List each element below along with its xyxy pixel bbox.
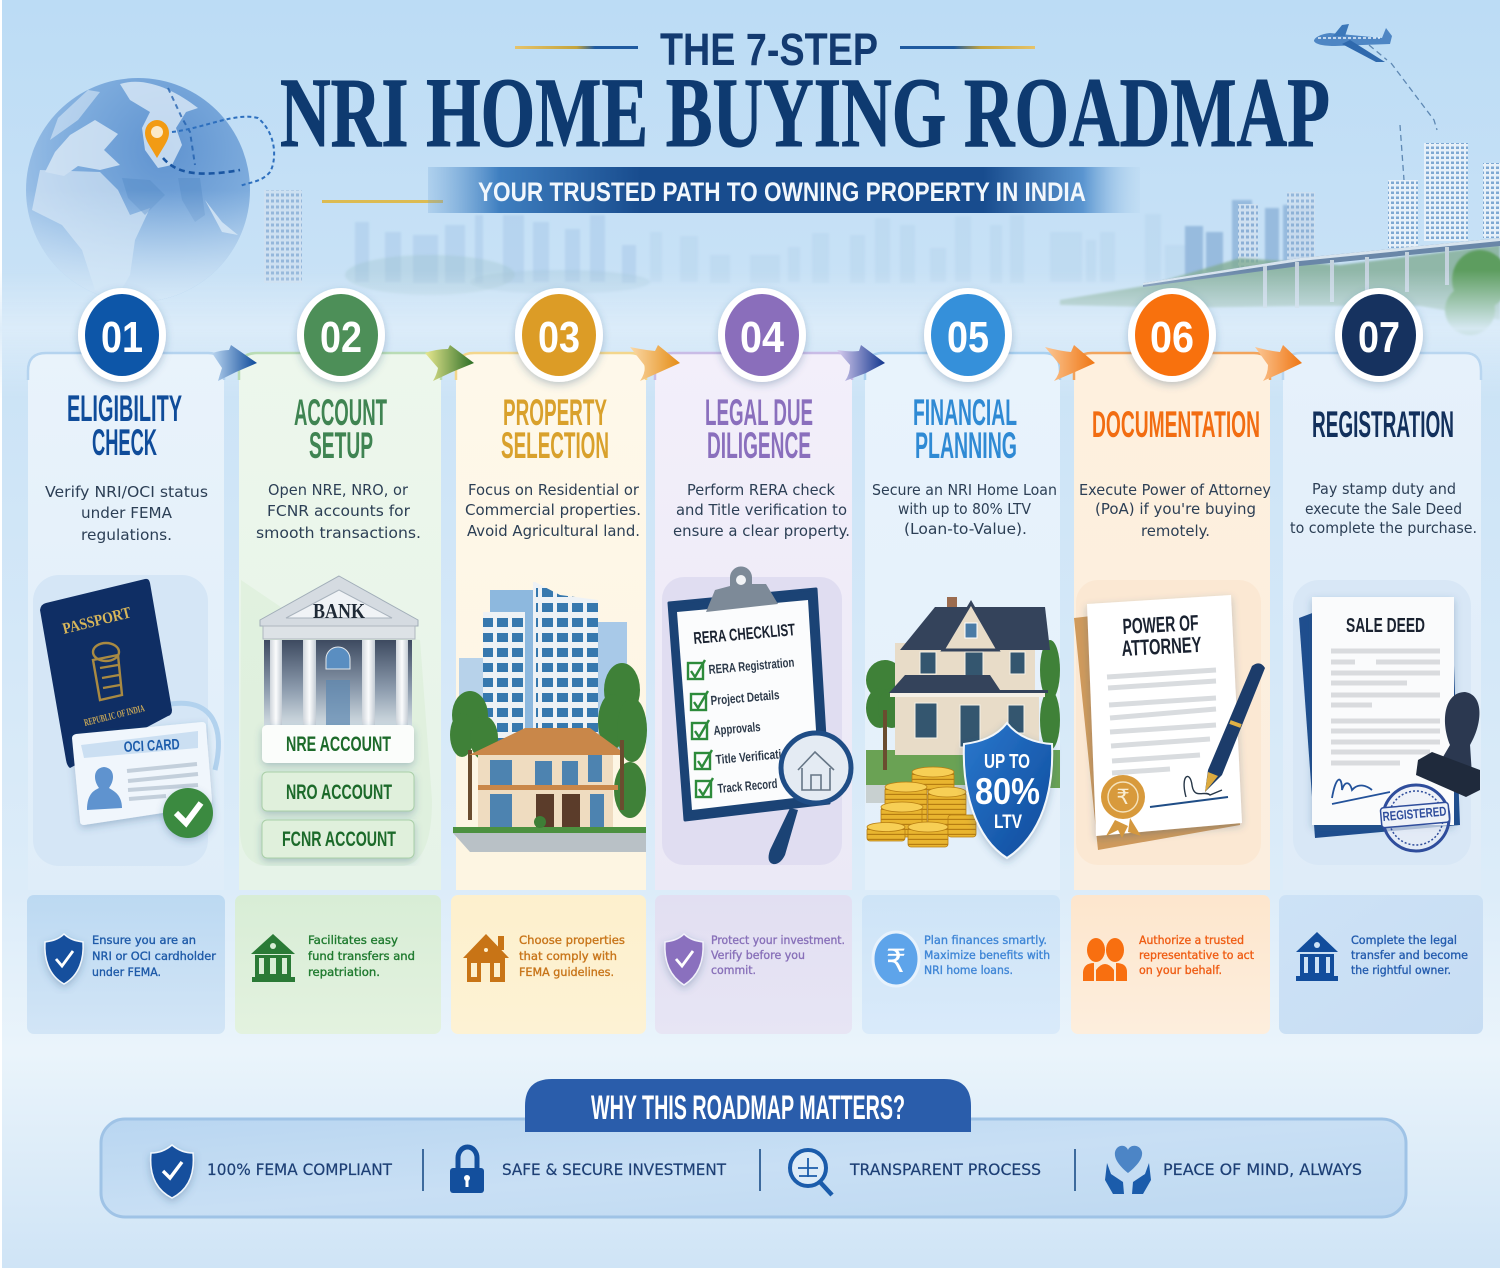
benefit: peace of mind: PEACE OF MIND, ALWAYS: [1163, 1160, 1362, 1179]
strip 3: property note: that comply with: [519, 949, 617, 963]
heading: account setup: ACCOUNT: [294, 392, 387, 433]
description: regulations.: [81, 526, 172, 544]
strip 1: eligibility note: NRI or OCI cardholder: [92, 949, 216, 963]
description: [465, 481, 641, 540]
badge 01: [78, 288, 166, 382]
badge 07: 07: [1358, 313, 1400, 362]
description: with up to 80% LTV: [898, 500, 1032, 518]
strip 5: finance note: [862, 895, 1060, 1034]
illustration: house, coins, LTV shield: [866, 597, 1060, 858]
badge 06: [1128, 288, 1216, 382]
benefit: FEMA compliant: 100% FEMA COMPLIANT: [207, 1160, 392, 1179]
strip 2: account note: fund transfers and: [308, 949, 415, 963]
description: [872, 481, 1057, 538]
registered seal: REGISTERED: [1382, 803, 1447, 824]
strip 5: finance note: Maximize benefits with: [924, 948, 1050, 962]
title line: the 7-step: THE 7-STEP: [660, 24, 878, 75]
description: Pay stamp duty and: [1312, 480, 1456, 498]
step 7 card: [1283, 353, 1481, 890]
description: [45, 483, 208, 544]
strip 1: eligibility note: under FEMA.: [92, 965, 161, 979]
badge 02: [297, 288, 385, 382]
icon: check badge: [163, 788, 213, 838]
strip 7: registration note: transfer and become: [1351, 948, 1468, 962]
right foreground towers: [1238, 143, 1500, 268]
strip 5: finance note: Plan finances smartly.: [924, 933, 1047, 947]
strip 4: diligence note: commit.: [711, 963, 756, 977]
account button: NRO: [262, 772, 414, 811]
step 2 card: [239, 353, 441, 890]
badge 03: 03: [538, 313, 580, 362]
description: Verify NRI/OCI status: [45, 483, 208, 501]
heading: legal due diligence: [705, 392, 813, 466]
icon: rupee seal: [1101, 775, 1145, 838]
description: Avoid Agricultural land.: [467, 522, 640, 540]
LTV shield: [964, 723, 1052, 858]
illustration: RERA checklist: [662, 566, 851, 865]
registered seal: [1380, 785, 1450, 851]
icon: stamp: [1416, 692, 1480, 797]
strip 7: registration note: the rightful owner.: [1351, 963, 1451, 977]
icon: pen: [1205, 663, 1265, 792]
description: remotely.: [1141, 522, 1210, 540]
benefit: transparent process: TRANSPARENT PROCESS: [849, 1160, 1041, 1179]
badge 04: 04: [740, 313, 784, 362]
heading: eligibility check: CHECK: [92, 422, 157, 463]
illustration: towers and building: [450, 582, 647, 852]
strip 2: account note: [235, 895, 441, 1034]
description: (Loan-to-Value).: [904, 520, 1027, 538]
subtitle banner: [322, 167, 1140, 213]
account button: FCNR: FCNR ACCOUNT: [282, 828, 396, 851]
heading: property selection: PROPERTY: [503, 392, 607, 433]
trees and river bank: [345, 245, 1500, 320]
illustration: RERA checklist: RERA CHECKLIST: [693, 620, 796, 648]
low-rise building: [469, 728, 620, 755]
badge 05: 05: [947, 313, 989, 362]
tab heading: WHY THIS ROADMAP MATTERS?: [591, 1089, 905, 1127]
description: [1079, 481, 1271, 540]
illustration: sale deed: SALE DEED: [1346, 615, 1425, 637]
checklist items: [688, 660, 713, 797]
illustration: power of attorney: [1074, 580, 1265, 865]
icon: rupee coin: ₹: [886, 942, 906, 980]
arrow 2 to 3: [425, 345, 474, 381]
strip 7: registration note: [1279, 895, 1483, 1034]
illustration: sale deed: [1293, 580, 1480, 865]
badge 03: [515, 288, 603, 382]
icon: magnifier: [769, 733, 851, 864]
illustration: RERA checklist: Track Record: [717, 776, 778, 796]
strip 4: diligence note: Protect your investment.: [711, 933, 845, 947]
passport: REPUBLIC OF INDIA: [83, 703, 146, 729]
step 6 card: [1074, 353, 1271, 890]
big tree right: [1445, 250, 1500, 335]
number badges: [78, 288, 1423, 382]
badge 05: [924, 288, 1012, 382]
icon: court building: [1296, 932, 1338, 981]
icon: location pin: [145, 120, 169, 158]
LTV shield: UP TO: [984, 751, 1030, 773]
benefit: secure investment: SAFE & SECURE INVESTMENT: [502, 1160, 726, 1179]
illustration: RERA checklist: Approvals: [713, 719, 761, 738]
description: [673, 481, 850, 540]
step 5 card: [865, 353, 1060, 890]
description: FCNR accounts for: [267, 502, 411, 520]
trees: [450, 663, 647, 818]
background skyline: [355, 200, 1313, 283]
step 3 card: [450, 353, 647, 890]
passport: PASSPORT: [61, 604, 133, 638]
strip 7: registration note: Complete the legal: [1351, 933, 1457, 947]
badge 07: [1335, 288, 1423, 382]
clipboard clip: [706, 566, 778, 612]
title line: the 7-step: [515, 24, 1035, 75]
description: [1290, 480, 1477, 537]
left foreground tower: [264, 190, 302, 283]
icon: shield: [45, 934, 83, 984]
strip 6: documentation note: representative to act: [1139, 948, 1254, 962]
subtitle banner: YOUR TRUSTED PATH TO OWNING PROPERTY IN INDIA: [478, 177, 1086, 207]
heading: account setup: SETUP: [309, 425, 373, 466]
heading: eligibility check: ELIGIBILITY: [67, 388, 182, 429]
arrow 1 to 2: [212, 345, 257, 381]
arrow 6 to 7: [1255, 345, 1302, 381]
benefit: FEMA compliant: [151, 1145, 392, 1198]
badge 06: 06: [1150, 313, 1194, 362]
strip 3: property note: Choose properties: [519, 933, 625, 947]
strip 6: documentation note: [1071, 895, 1270, 1034]
icon: people: [1083, 938, 1127, 981]
illustration: bank: BANK: [313, 599, 366, 623]
heading: property selection: SELECTION: [501, 425, 609, 466]
description: Open NRE, NRO, or: [268, 481, 409, 499]
account button: NRO: NRO ACCOUNT: [286, 781, 392, 804]
description: (PoA) if you're buying: [1095, 500, 1256, 518]
icon: globe: [26, 78, 274, 302]
LTV shield: 80%: [975, 771, 1040, 812]
step 1 card: [28, 353, 224, 890]
illustration: RERA checklist: Title Verificati: [715, 746, 782, 767]
illustration: passport and OCI card: [33, 575, 218, 866]
passport: [40, 579, 172, 768]
heading: property selection: [501, 392, 609, 466]
panel: why this roadmap matters: [101, 1079, 1406, 1217]
icon: house: [463, 934, 509, 982]
coins: [867, 767, 976, 847]
benefit: secure investment: [450, 1147, 726, 1193]
bridge: [1143, 238, 1500, 308]
description: Perform RERA check: [687, 481, 835, 499]
badge 02: 02: [320, 313, 362, 362]
illustration: RERA checklist: Project Details: [710, 687, 780, 708]
illustration: bank: [240, 576, 432, 866]
account button: NRE: [262, 725, 414, 763]
heading: financial planning: PLANNING: [915, 425, 1017, 466]
heading: legal due diligence: DILIGENCE: [707, 425, 811, 466]
strip 6: documentation note: Authorize a trusted: [1139, 933, 1244, 947]
illustration: power of attorney: ATTORNEY: [1121, 632, 1202, 661]
illustration: power of attorney: POWER OF: [1122, 610, 1199, 639]
description: [256, 481, 421, 542]
icon: airplane: [1314, 24, 1437, 180]
step 4 card: [655, 353, 852, 890]
strip 4: diligence note: [655, 895, 852, 1034]
heading: financial planning: FINANCIAL: [913, 392, 1017, 433]
arrow 5 to 6: [1045, 345, 1095, 381]
account button: FCNR: [262, 820, 414, 858]
description: Execute Power of Attorney: [1079, 481, 1271, 499]
badge 04: [718, 288, 806, 382]
strip 1: eligibility note: Ensure you are an: [92, 933, 196, 947]
river mist: [0, 270, 1500, 400]
arrow 3 to 4: [630, 345, 680, 381]
account button: NRE: NRE ACCOUNT: [286, 733, 391, 756]
benefit: transparent process: [790, 1150, 1041, 1195]
strip 1: eligibility note: [27, 895, 225, 1034]
description: to complete the purchase.: [1290, 519, 1477, 537]
description: execute the Sale Deed: [1305, 500, 1462, 518]
strip 2: account note: Facilitates easy: [308, 933, 398, 947]
LTV shield: LTV: [994, 812, 1022, 833]
heading: account setup: [294, 392, 387, 466]
connector arrows: [212, 345, 1302, 381]
benefit: peace of mind: [1105, 1146, 1362, 1194]
description: and Title verification to: [676, 501, 847, 519]
description: ensure a clear property.: [673, 522, 850, 540]
tab heading: [525, 1079, 971, 1132]
strip 6: documentation note: on your behalf.: [1139, 963, 1222, 977]
icon: bank: [251, 934, 295, 982]
heading: financial planning: [913, 392, 1017, 466]
icon: rupee coin: [873, 932, 919, 986]
description: Secure an NRI Home Loan: [872, 481, 1057, 499]
strip 5: finance note: NRI home loans.: [924, 963, 1013, 977]
heading: legal due diligence: LEGAL DUE: [705, 392, 813, 433]
heading: documentation: DOCUMENTATION: [1092, 404, 1260, 445]
strip 3: property note: FEMA guidelines.: [519, 965, 614, 979]
oci card: [72, 722, 212, 825]
badge 01: 01: [101, 313, 143, 362]
strip 4: diligence note: Verify before you: [711, 948, 805, 962]
description: smooth transactions.: [256, 524, 421, 542]
arrow 4 to 5: [837, 345, 885, 381]
icon: shield: [665, 934, 703, 985]
oci card: OCI CARD: [123, 736, 180, 756]
description: under FEMA: [81, 504, 173, 522]
illustration: RERA checklist: RERA Registration: [708, 655, 795, 677]
strip 2: account note: repatriation.: [308, 965, 380, 979]
heading: eligibility check: [67, 388, 182, 463]
description: Focus on Residential or: [468, 481, 640, 499]
description: Commercial properties.: [465, 501, 641, 519]
icon: rupee seal: ₹: [1116, 785, 1130, 809]
strip 3: property note: [451, 895, 646, 1034]
